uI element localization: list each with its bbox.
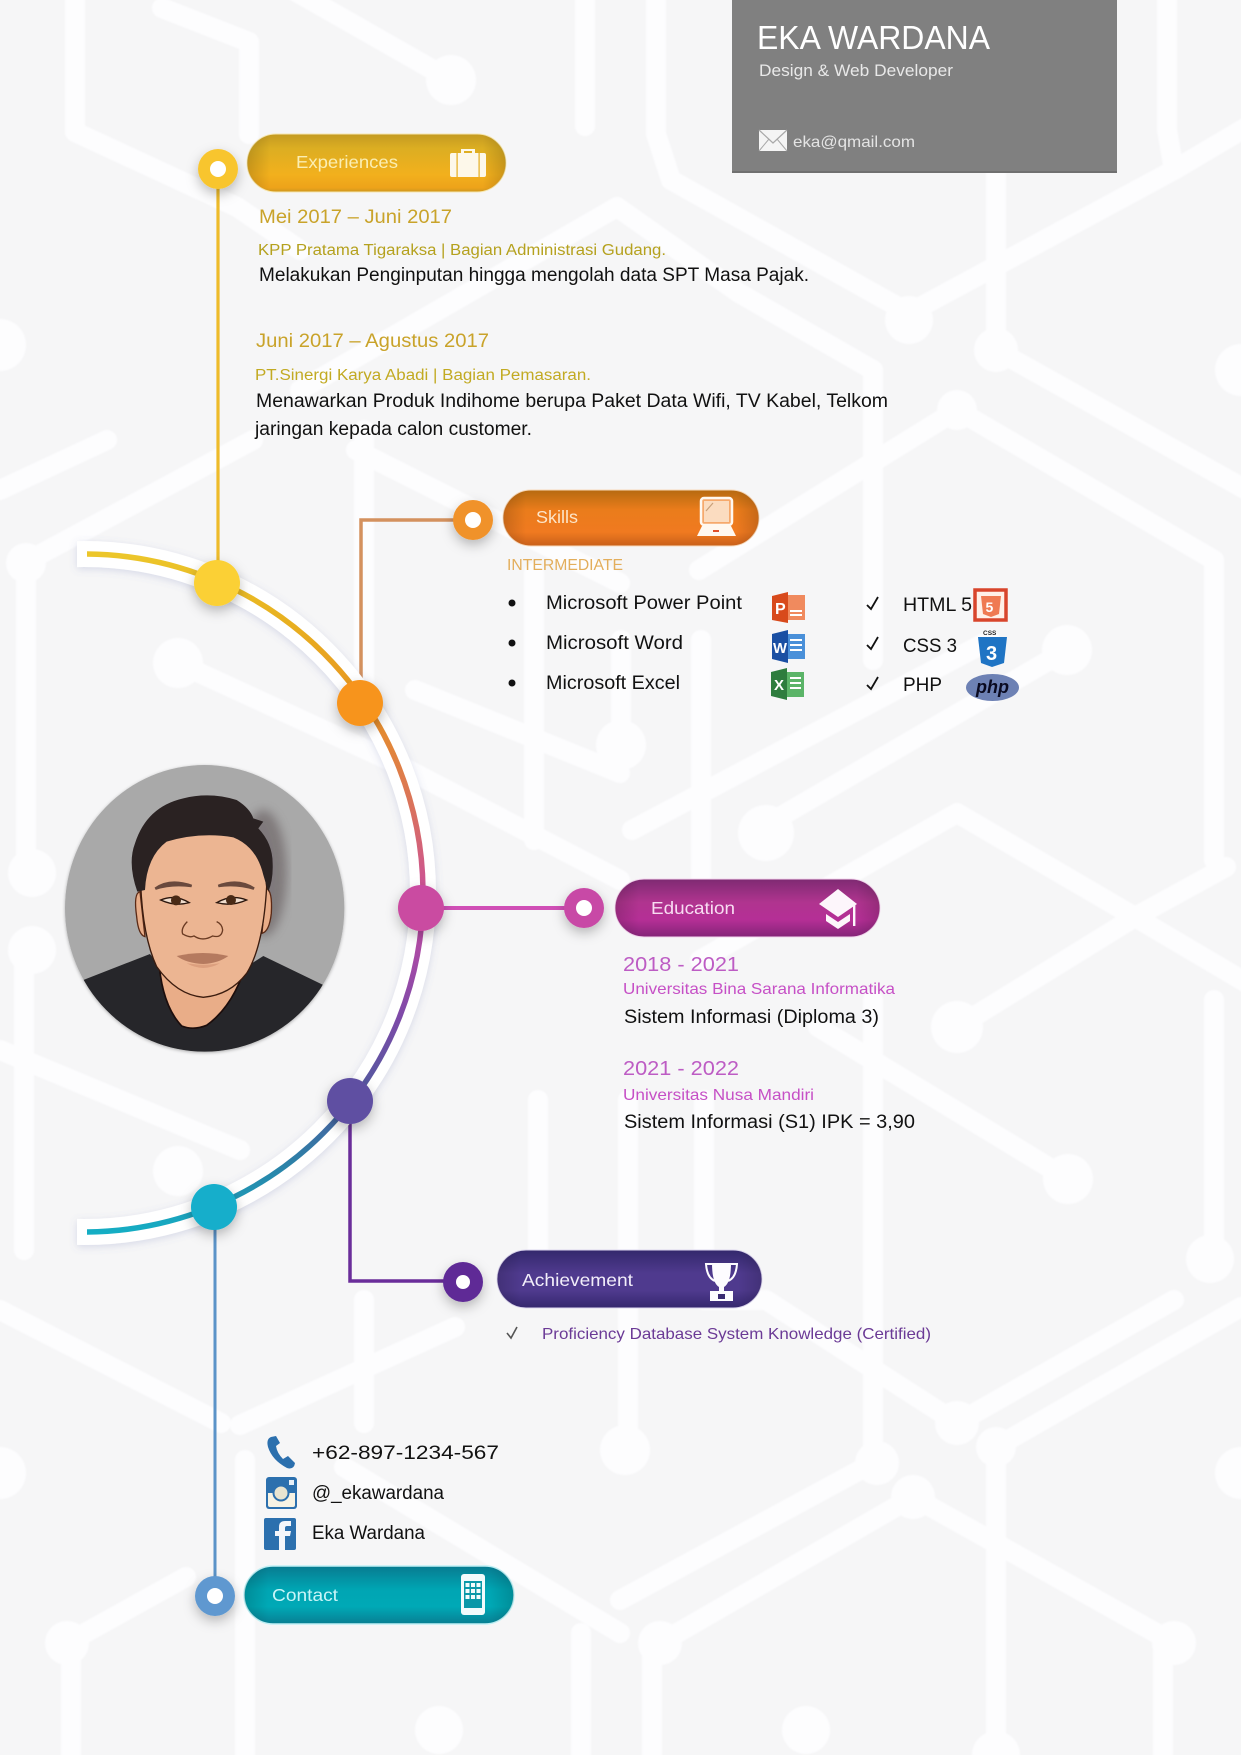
icon: graduation cap — [819, 889, 857, 929]
icon: powerpoint — [772, 592, 805, 623]
icon: html5: 5 — [986, 599, 994, 615]
icon: envelope — [759, 130, 787, 151]
web skill checkmarks — [867, 597, 878, 689]
instagram handle: @_ekawardana — [312, 1483, 444, 1504]
icon: trophy — [706, 1263, 737, 1301]
education 1 school: Universitas Bina Sarana Informatika — [623, 981, 895, 998]
nose — [182, 922, 223, 939]
web skill list: PHP — [903, 675, 942, 696]
icon: excel — [771, 668, 804, 700]
web skill list: HTML 5 — [903, 595, 972, 616]
experience 1 employer: KPP Pratama Tigaraksa | Bagian Administrasi Gudang. — [258, 242, 666, 259]
icon: css3: 3 — [986, 643, 997, 665]
section: skills — [453, 490, 1019, 701]
phone number: +62-897-1234-567 — [312, 1443, 499, 1464]
eyes — [161, 898, 189, 904]
education 1 years: 2018 - 2021 — [623, 954, 739, 976]
achievement check — [507, 1327, 517, 1338]
education 2 major: Sistem Informasi (S1) IPK = 3,90 — [624, 1112, 915, 1133]
experience 2 employer: PT.Sinergi Karya Abadi | Bagian Pemasaran. — [255, 367, 591, 384]
education pill — [615, 879, 880, 937]
office skill list: Microsoft Word — [546, 633, 683, 654]
office skill list — [508, 593, 743, 694]
hair shadow — [240, 810, 287, 937]
education pill: Education — [651, 898, 735, 918]
contact pill: Contact — [272, 1585, 338, 1605]
contact pill — [244, 1566, 514, 1624]
main arc — [74, 540, 438, 1250]
experience 2 description line 2: jaringan kepada calon customer. — [254, 419, 532, 440]
arc node: purple — [327, 1078, 373, 1124]
icon: word: W — [773, 640, 788, 657]
neck — [159, 971, 241, 1029]
hair — [132, 795, 273, 892]
icon: word — [772, 630, 805, 663]
web skill list — [903, 595, 972, 696]
eyebrows — [155, 883, 192, 889]
shirt — [83, 954, 327, 1057]
experiences pill — [247, 134, 506, 192]
arc node: orange — [337, 680, 383, 726]
experience 2 description line 1: Menawarkan Produk Indihome berupa Paket Data Wifi, TV Kabel, Telkom — [256, 391, 888, 412]
experiences node — [198, 149, 238, 189]
experience 2 date: Juni 2017 – Agustus 2017 — [256, 331, 489, 352]
education node — [564, 888, 604, 928]
office skill list: Microsoft Power Point — [546, 593, 743, 614]
proficiency label: INTERMEDIATE — [507, 557, 623, 574]
office skill list: Microsoft Excel — [546, 673, 680, 694]
education 2 school: Universitas Nusa Mandiri — [623, 1087, 814, 1104]
icon: phone — [267, 1436, 295, 1468]
icon: briefcase — [450, 149, 486, 177]
skills pill — [503, 490, 759, 546]
face — [141, 833, 267, 997]
icon: laptop — [697, 498, 736, 536]
icon: smartphone — [461, 1574, 485, 1615]
web skill list: CSS 3 — [903, 636, 957, 657]
icon: excel: X — [774, 677, 784, 694]
icon: instagram — [266, 1477, 297, 1509]
icon: html5 — [975, 590, 1006, 620]
icon: php: php — [975, 677, 1009, 697]
achievement text: Proficiency Database System Knowledge (Certified) — [542, 1326, 931, 1343]
facebook name: Eka Wardana — [312, 1523, 425, 1544]
job title: Design & Web Developer — [759, 62, 954, 80]
avatar portrait — [65, 765, 344, 1057]
section: experiences — [198, 134, 888, 440]
education 1 major: Sistem Informasi (Diploma 3) — [624, 1007, 879, 1028]
achievement pill: Achievement — [522, 1270, 633, 1290]
email: eka@qmail.com — [793, 134, 915, 151]
section: contact — [195, 1436, 514, 1624]
experience 1 date: Mei 2017 – Juni 2017 — [259, 207, 452, 228]
mouth — [177, 953, 228, 964]
experiences pill: Experiences — [296, 152, 398, 172]
arc node: cyan — [191, 1184, 237, 1230]
icon: powerpoint: P — [775, 601, 786, 618]
contact node — [195, 1576, 235, 1616]
skills node — [453, 500, 493, 540]
arc node: pink — [398, 885, 444, 931]
name: EKA WARDANA — [757, 19, 990, 56]
icon: facebook — [264, 1518, 296, 1550]
icon: css3: CSS — [983, 630, 997, 637]
skills pill: Skills — [536, 507, 578, 527]
achievement pill — [497, 1250, 762, 1308]
icon: css3 — [978, 630, 1007, 667]
experience 1 description: Melakukan Penginputan hingga mengolah data SPT Masa Pajak. — [259, 265, 809, 286]
education 2 years: 2021 - 2022 — [623, 1058, 739, 1080]
icon: php — [966, 674, 1019, 701]
arc node: yellow — [194, 560, 240, 606]
section: achievement — [443, 1250, 931, 1343]
section: education — [564, 879, 915, 1133]
header panel — [732, 0, 1117, 173]
timeline connector lines — [215, 168, 585, 1596]
ears — [136, 892, 145, 937]
achievement node — [443, 1262, 483, 1302]
